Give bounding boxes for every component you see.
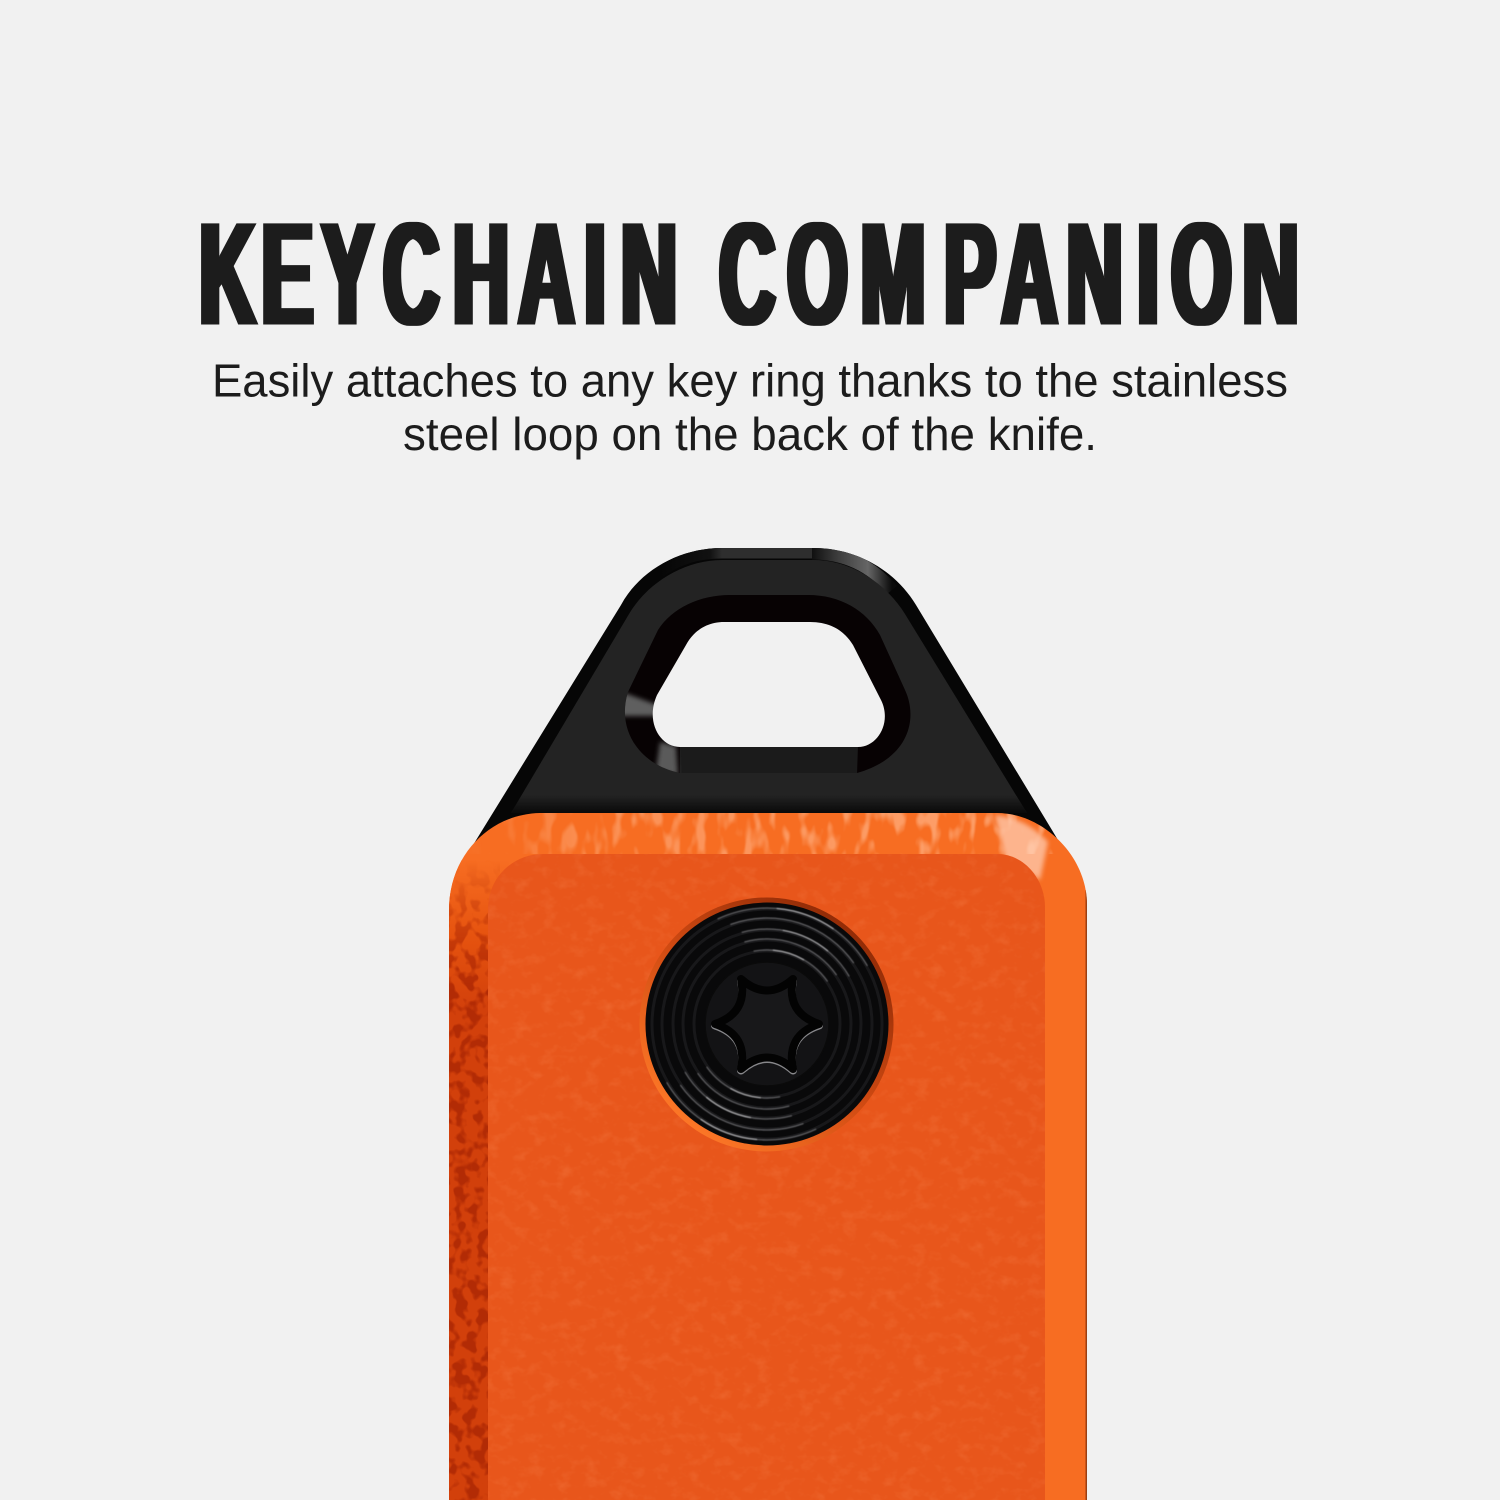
orange handle: [449, 813, 1087, 1500]
loop hole: [620, 595, 910, 776]
torx recess: [715, 979, 819, 1070]
steel keychain loop: [470, 548, 1064, 850]
knife illustration: [449, 548, 1087, 1500]
screw rings: [613, 870, 921, 1178]
subtitle: Easily attaches to any key ring thanks to the stainless: [212, 354, 1288, 406]
title: KEYCHAIN COMPANION: [199, 192, 1299, 356]
subtitle: [212, 354, 1288, 460]
left bevel: [449, 813, 1087, 1500]
screw: [613, 870, 921, 1178]
handle face: [488, 854, 1045, 1500]
subtitle: steel loop on the back of the knife.: [403, 408, 1097, 460]
